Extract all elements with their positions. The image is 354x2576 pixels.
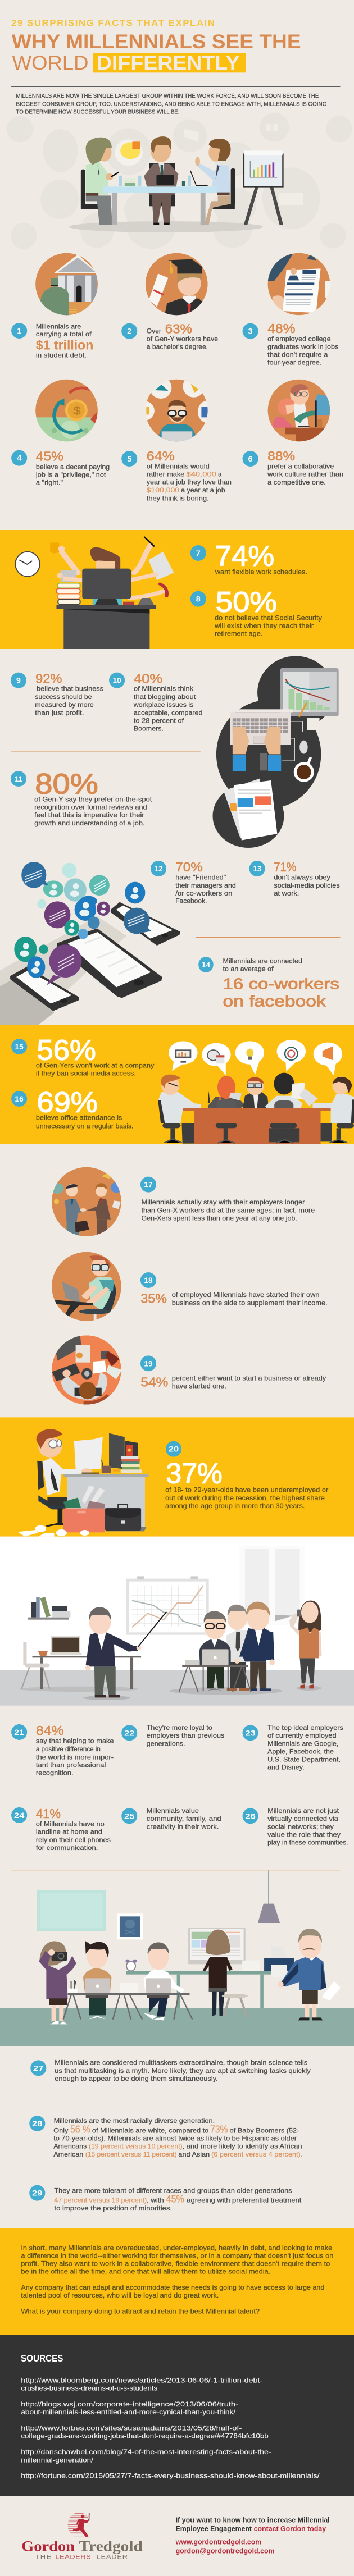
logo: Gordon Tredgold: LEADERS'	[55, 2553, 93, 2560]
icon: handshake	[51, 1167, 122, 1237]
fact 13	[249, 860, 340, 897]
fact 14	[198, 957, 339, 1010]
fact 12: have "Friended"	[175, 874, 226, 881]
fact 2: a bachelor's degree.	[147, 342, 208, 350]
section: facts 19 and 20	[0, 1335, 354, 1537]
fact 3: of employed college	[267, 335, 331, 342]
fact 2: 2	[127, 327, 131, 336]
fact 26: 26	[245, 1812, 256, 1821]
conclusion text: be in the office all the time, and one that will allow them to utilize social media.	[21, 2268, 270, 2275]
fact 20	[165, 1441, 329, 1510]
panel: yellow conclusion	[0, 2228, 354, 2335]
fact 9: than just profit.	[35, 709, 84, 716]
fact 6: 6	[248, 455, 253, 464]
fact 8: will exist when they reach their	[214, 622, 314, 629]
logo: Gordon Tredgold: THE	[35, 2553, 51, 2560]
fact 7: 7	[196, 549, 201, 558]
fact 5: $100,000	[147, 486, 179, 494]
fact 28: (6 percent versus 4 percent)	[211, 2150, 301, 2158]
contact text	[175, 2516, 330, 2555]
fact 4	[11, 450, 110, 486]
fact 21: a positive difference in	[36, 1745, 101, 1753]
illustration: desk top view with laptop, coffee and papers	[212, 656, 339, 848]
logo: Gordon Tredgold: LEADER	[97, 2553, 128, 2560]
pie chart bubble	[115, 139, 143, 166]
right person	[190, 139, 235, 225]
fact 1: carrying a total of	[36, 330, 92, 338]
fact 22: generations.	[147, 1739, 185, 1747]
conclusion text: What is your company doing to attract and retain the best Millennial talent?	[21, 2307, 260, 2315]
fact 29: 29	[32, 2189, 43, 2198]
fact 1: in student debt.	[36, 351, 87, 359]
sources list: millennial-generation/	[21, 2456, 93, 2464]
fact 13: 71%	[274, 860, 297, 874]
fact 5	[121, 449, 232, 502]
fact 14: 16 co-workers	[223, 975, 339, 993]
fact 10: 10	[112, 677, 121, 685]
fact 1: Millennials are	[36, 322, 81, 330]
center person	[144, 136, 178, 225]
fact 5: rather make	[147, 471, 184, 478]
fact 16: 69%	[37, 1086, 98, 1118]
fact 26: Millennials are not just	[267, 1807, 339, 1815]
fact 18: 18	[144, 1276, 153, 1285]
fact 9: measured by more	[35, 701, 94, 709]
fact 10: of Millennials think	[134, 685, 194, 692]
fact 21: say that helping to make	[36, 1737, 114, 1744]
presentation board	[244, 150, 283, 225]
fact 14: on facebook	[223, 992, 326, 1010]
fact 28: Millennials are the most racially diverse generation.	[54, 2117, 215, 2125]
sources list: http://danschawbel.com/blog/74-of-the-most-interesting-facts-about-the-	[21, 2448, 271, 2456]
fact 8	[190, 586, 322, 637]
fact 28: 56 %	[70, 2123, 90, 2135]
section: facts 4 to 6	[0, 449, 354, 649]
fact 6: a competitive one.	[267, 478, 326, 486]
fact 25: Millennials value	[147, 1807, 199, 1815]
fact 4: 45%	[36, 450, 63, 464]
section: footer	[21, 2513, 330, 2560]
conclusion text: talented pool of resources, who will be loyal and do great work.	[21, 2291, 219, 2299]
fact 19: 54%	[140, 1375, 168, 1390]
fact 22: employers than previous	[147, 1732, 225, 1739]
fact 27: 27	[33, 2065, 44, 2073]
fact 13: social-media policies	[274, 881, 340, 889]
fact 20: among the age group in more than 30 years.	[165, 1502, 305, 1510]
icon: people at computer	[268, 380, 330, 442]
section: conclusion and sources	[0, 2228, 354, 2496]
illustration: multitasking worker at desk	[50, 537, 174, 649]
fact 6	[243, 449, 343, 486]
fact 28: to 70-year-olds). Millennials are almost twice as likely to be Hispanic as older	[53, 2135, 297, 2142]
fact 21: recognition.	[36, 1769, 74, 1776]
fact 14: 14	[202, 961, 210, 970]
fact 18: 35%	[140, 1292, 167, 1306]
fact 14: Millennials are connected	[223, 957, 302, 965]
fact 1	[11, 322, 93, 359]
fact 9	[11, 672, 103, 716]
fact 22	[121, 1724, 225, 1747]
icon: bank and money bag	[35, 253, 98, 316]
illustration: team meeting with idea bubbles	[158, 1040, 354, 1144]
intro text	[16, 93, 326, 115]
fact 12: 70%	[175, 860, 203, 874]
fact 8: retirement age.	[215, 630, 262, 637]
logo: Gordon Tredgold	[21, 2513, 143, 2560]
fact 10: workplace issues is	[133, 701, 193, 709]
fact 25	[121, 1807, 221, 1830]
fact 19	[140, 1355, 326, 1390]
floor band	[0, 2021, 354, 2046]
fact 24: 41%	[36, 1807, 61, 1821]
fact 9: success should be	[35, 693, 92, 701]
fact 9: 92%	[35, 672, 62, 686]
fact 4: a "right."	[36, 479, 63, 486]
fact 4: believe a decent paying	[36, 463, 110, 471]
fact 5: 64%	[147, 449, 175, 463]
fact 28: , and more likely to identify as African	[183, 2143, 302, 2150]
fact 28: of Millennials are white, compared to	[92, 2126, 209, 2134]
fact 8: do not believe that Social Security	[215, 614, 322, 622]
fact 23	[243, 1724, 343, 1771]
fact 28: (19 percent versus 10 percent)	[89, 2143, 183, 2150]
fact 27	[30, 2059, 311, 2082]
fact 22: They're more loyal to	[147, 1724, 212, 1732]
fact 1: $1 trillion	[36, 339, 93, 353]
section: presentation room and facts 21 to 23	[0, 1537, 354, 1776]
sources list: college-grads-are-working-jobs-that-dont-require-a-degree/#47784bfc10bb	[21, 2432, 269, 2440]
fact 23: The top ideal employers	[267, 1724, 343, 1732]
fact 24: rely on their cell phones	[36, 1836, 111, 1844]
fact 21: 21	[14, 1728, 24, 1737]
contact text: contact Gordon today	[254, 2525, 326, 2533]
fact 29: 47 percent versus 19 percent)	[54, 2196, 147, 2204]
fact 28: Only	[53, 2126, 68, 2134]
fact 18: of employed Millennials have started their own	[172, 1291, 320, 1299]
fact 23: 23	[245, 1729, 256, 1738]
sources list: http://www.bloomberg.com/news/articles/2013-06-06/-1-trillion-debt-	[21, 2377, 262, 2384]
contact text: Employee Engagement	[176, 2525, 252, 2533]
icon: CV resume	[267, 253, 331, 315]
fact 17: Millennials actually stay with their employers longer	[142, 1198, 305, 1206]
fact 4: 4	[17, 454, 22, 463]
fact 2: Over	[147, 327, 161, 335]
left person	[81, 138, 119, 225]
fact 27: us that multitasking is a myth. More likely, they are apt at switching tasks quickly	[55, 2067, 311, 2075]
fact 3: that don't require a	[267, 351, 328, 358]
fact 15: of Gen-Yers won't work at a company	[36, 1062, 155, 1069]
logo: Gordon Tredgold: Tredgold	[79, 2538, 143, 2555]
fact 13: don't always obey	[274, 874, 330, 881]
section: facts 24 to 26 and office scene	[0, 1807, 354, 2045]
fact 10: acceptable, compared	[134, 709, 202, 716]
fact 2	[121, 322, 218, 350]
fact 3: four-year degree.	[267, 359, 321, 366]
fact 5: $40,000	[186, 471, 216, 478]
fact 5: year at a job they love than	[147, 478, 232, 486]
fact 5: they think is boring.	[147, 494, 209, 502]
fact 15: if they ban social-media access.	[36, 1070, 136, 1077]
sources heading: SOURCES	[21, 2354, 63, 2364]
fact 10: that blogging about	[134, 693, 196, 701]
icon: creative man with glasses	[145, 380, 208, 441]
fact 18: business on the side to supplement their income.	[172, 1299, 328, 1307]
fact 11: growth and understanding of a job.	[34, 819, 145, 827]
fact 13: at work.	[274, 889, 299, 897]
fact 19: 19	[144, 1360, 153, 1368]
fact 27: Millennials are considered multitaskers extraordinaire, though brain science tells	[55, 2059, 307, 2066]
fact 17: than Gen-X workers did at the same ages; in fact, more	[142, 1206, 315, 1214]
panel: yellow multitasking	[0, 530, 354, 649]
fact 24: of Millennials have no	[36, 1820, 105, 1828]
title main: DIFFERENTLY	[97, 52, 240, 74]
intro text: TO DETERMINE HOW SUCCESSFUL YOUR BUSINESS WILL BE.	[16, 109, 179, 115]
conclusion text	[21, 2244, 333, 2315]
title kicker: 29 SURPRISING FACTS THAT EXPLAIN	[11, 17, 215, 28]
section: facts 1 to 3	[11, 253, 338, 442]
fact 29: agreeing with preferential treatment	[187, 2196, 302, 2204]
fact 20: of 18- to 29-year-olds have been underemployed or	[165, 1486, 329, 1493]
fact 20: 20	[169, 1445, 179, 1454]
fact 24: for communication.	[36, 1844, 98, 1852]
sources list: http://fortune.com/2015/05/27/7-facts-every-business-should-know-about-millennials/	[21, 2472, 320, 2479]
fact 28: 28	[32, 2120, 43, 2129]
fact 5: a	[218, 471, 221, 478]
icon: man with laptop	[52, 1252, 121, 1322]
fact 17: 17	[144, 1181, 153, 1189]
fact 17: Gen-Xers spent less than one year at any one job.	[142, 1214, 297, 1222]
fact 3: 48%	[267, 322, 296, 336]
fact 5: of Millennials would	[147, 463, 210, 470]
panel: sources	[0, 2335, 354, 2496]
fact 28: American	[53, 2150, 83, 2158]
illustration: creative office	[0, 1870, 354, 2045]
fact 5: 5	[127, 455, 132, 464]
title main	[12, 31, 301, 74]
fact 21: 84%	[36, 1724, 64, 1738]
fact 8: 8	[196, 595, 201, 604]
fact 21	[11, 1724, 114, 1776]
sources list	[21, 2377, 320, 2479]
sources list: crushes-business-dreams-of-u-s-students	[21, 2385, 157, 2392]
fact 3: 3	[248, 327, 253, 336]
fact 28: and Asian	[178, 2150, 210, 2158]
fact 26: value the role that they	[267, 1830, 341, 1838]
fact 13: 13	[253, 865, 262, 874]
section: facts 17 and 18	[51, 1167, 328, 1322]
fact 25: 25	[124, 1812, 135, 1821]
fact 19: percent either want to start a business or already	[172, 1374, 326, 1382]
icon: money cycle	[35, 380, 99, 442]
fact 10: 40%	[134, 672, 162, 686]
fact 6: prefer a collaborative	[267, 463, 334, 470]
fact 20: 37%	[166, 1458, 223, 1490]
icon: wall clock	[15, 552, 40, 577]
fact 26	[243, 1807, 348, 1846]
contact text: www.gordontredgold.com	[175, 2538, 261, 2546]
illustration: office presentation room	[0, 1537, 354, 1706]
fact 9: believe that business	[37, 685, 103, 692]
title block	[11, 17, 301, 74]
fact 10: to 28 percent of	[134, 716, 184, 724]
fact 25: creativity in their work.	[147, 1823, 219, 1830]
fact 23: and Disney.	[267, 1764, 305, 1771]
fact 19: have started one.	[172, 1382, 226, 1390]
fact 15: 56%	[37, 1034, 96, 1066]
fact 9: 9	[16, 677, 21, 685]
fact 17	[140, 1177, 315, 1222]
sources list: http://www.forbes.com/sites/susanadams/2013/05/28/half-of-	[21, 2424, 242, 2432]
fact 11: 11	[15, 775, 22, 784]
fact 3: graduates work in jobs	[267, 342, 338, 350]
fact 25: community, family, and	[147, 1815, 221, 1823]
fact 24	[11, 1807, 111, 1852]
sources list: http://blogs.wsj.com/corporate-intelligence/2013/06/06/truth-	[21, 2400, 238, 2408]
fact 15: 15	[15, 1043, 24, 1052]
icon: top view of worker at desk	[52, 1335, 122, 1405]
fact 6: work culture rather than	[267, 471, 343, 478]
fact 18	[140, 1272, 328, 1307]
fact 11: feel that this is imperative for their	[34, 811, 144, 819]
fact 12: their managers and	[175, 881, 236, 889]
fact 29	[29, 2185, 302, 2212]
illustration: phones with social bubbles	[0, 862, 180, 1025]
fact 23: of currently employed	[267, 1732, 337, 1739]
fact 8: 50%	[216, 586, 277, 618]
fact 10	[109, 672, 202, 732]
fact 3	[243, 322, 338, 366]
fact 28: 73%	[210, 2123, 228, 2135]
fact 12: /or co-workers on	[175, 889, 232, 897]
fact 27: enough to appear to be doing them simultaneously.	[55, 2075, 218, 2082]
fact 1: 1	[17, 327, 21, 336]
fact 16: believe office attendance is	[36, 1113, 122, 1121]
sources list: about-millennials-less-entitled-and-more-cynical-than-you-think/	[21, 2408, 235, 2416]
fact 11	[11, 768, 152, 827]
icon: money cycle: $	[73, 404, 81, 417]
fact 23: U.S. State Department,	[267, 1756, 341, 1763]
fact 2: of Gen-Y workers have	[147, 335, 218, 342]
title main: WORLD	[12, 52, 89, 74]
fact 29: , with	[147, 2196, 164, 2204]
fact 16: unnecessary on a regular basis.	[36, 1122, 133, 1130]
fact 29: They are more tolerant of different races and groups than older generations	[54, 2187, 292, 2194]
fact 12: Facebook.	[175, 897, 207, 905]
fact 12	[151, 860, 236, 905]
fact 7	[190, 540, 307, 576]
panel: yellow social access	[0, 1025, 354, 1144]
fact 11: of Gen-Y say they prefer on-the-spot	[34, 795, 152, 803]
fact 7: 74%	[215, 540, 274, 572]
section: facts 9 to 11	[11, 656, 340, 905]
fact 29: to improve the position of minorities.	[54, 2204, 172, 2212]
fact 24: 24	[14, 1811, 25, 1820]
fact 10: Boomers.	[134, 725, 164, 732]
fact 28	[29, 2116, 302, 2158]
fact 6: 88%	[267, 449, 295, 463]
illustration: business meeting at table	[7, 113, 352, 249]
fact 11: recognition over formal reviews and	[34, 803, 147, 811]
icon: graduate	[146, 253, 208, 316]
table with bottles and books	[103, 176, 217, 225]
fact 23: Millennials are Google,	[267, 1739, 338, 1747]
logo: Gordon Tredgold: Gordon	[21, 2538, 75, 2555]
section: phones and fact 14	[0, 862, 354, 1144]
illustration: stressed worker at desk	[17, 1429, 148, 1537]
fact 11: 80%	[35, 768, 98, 800]
fact 14: to an average of	[223, 965, 274, 972]
fact 21: the world is more impor-	[36, 1753, 114, 1761]
icon: torch runner	[67, 2513, 90, 2537]
fact 12: 12	[154, 865, 163, 874]
panel: yellow underemployment	[0, 1417, 354, 1537]
fact 5: a year at a job	[181, 486, 225, 494]
fact 16	[11, 1086, 133, 1130]
fact 29: 45%	[166, 2193, 184, 2205]
fact 28: of Baby Boomers (52-	[230, 2126, 299, 2134]
fact 15	[11, 1034, 155, 1077]
title main: WHY MILLENNIALS SEE THE	[12, 31, 301, 53]
section: facts 27 to 29	[0, 2021, 354, 2212]
fact 7: want flexible work schedules.	[215, 568, 307, 576]
fact 23: Apple, Facebook, the	[267, 1747, 334, 1755]
fact 28: .	[301, 2150, 302, 2158]
fact 28: (15 percent versus 11 percent)	[85, 2150, 177, 2158]
fact 4: job is a "privilege," not	[35, 471, 106, 478]
fact 16: 16	[15, 1095, 24, 1104]
contact text: gordon@gordontredgold.com	[176, 2547, 275, 2555]
fact 26: social networks; they	[267, 1823, 334, 1830]
fact 24: landline at home and	[36, 1828, 102, 1835]
fact 20: out of work during the recession, the highest share	[165, 1494, 325, 1502]
megaphone and email ghost icons	[184, 124, 303, 205]
fact 2: 63%	[165, 322, 192, 336]
fact 26: virtually connected via	[267, 1815, 338, 1823]
fact 28: Americans	[53, 2143, 87, 2150]
fact 21: tant than professional	[36, 1761, 106, 1769]
fact 22: 22	[124, 1729, 134, 1738]
